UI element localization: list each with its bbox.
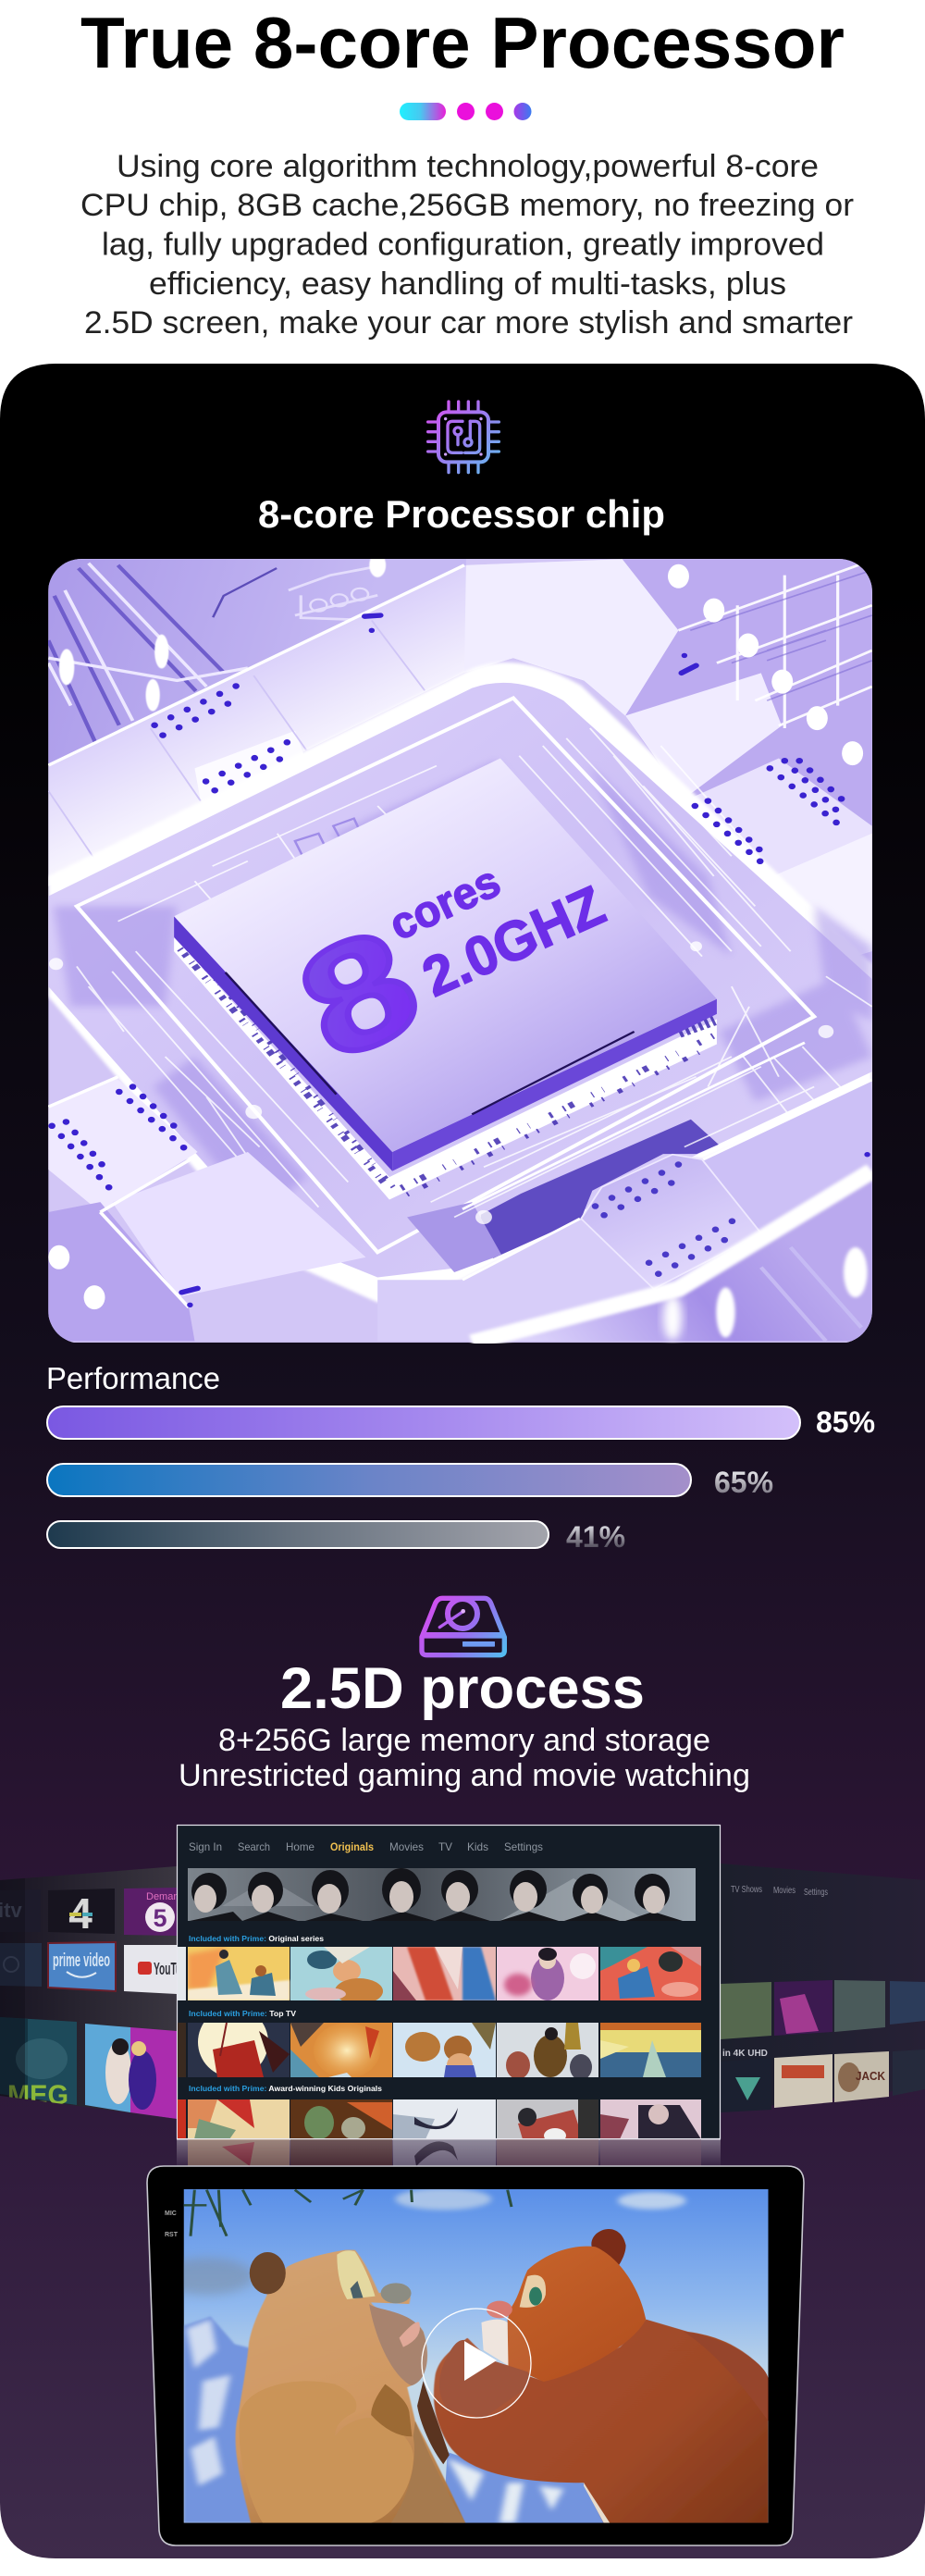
intro paragraph: lag, fully upgraded configuration, greatly improved [102,228,824,263]
text: storage description [179,1723,750,1793]
video scene [158,2188,769,2523]
bar: 41%: 41% [566,1520,625,1554]
screen reflection [177,2139,721,2166]
panel: right app wall [721,1864,925,2112]
app tile: YouTube: YouTube [154,1960,192,1978]
icon: hard drive [421,1598,505,1655]
panel: streaming app screen [177,1825,721,2143]
panel: processor illustration [48,553,874,1343]
bar: 65%: 65% [714,1466,773,1499]
row label: top TV: Included with Prime: Top TV [189,2009,296,2018]
menu text: Movies [773,1886,796,1896]
row label: award-winning: Included with Prime: Award-winning Kids Originals [189,2084,382,2093]
app tile: prime video: prime video [53,1951,110,1971]
icon: play button [422,2309,531,2418]
bar: 85%: 85% [816,1406,875,1439]
intro paragraph: CPU chip, 8GB cache,256GB memory, no freezing or [80,188,854,223]
text: storage description: 8+256G large memory and storage [218,1723,710,1758]
navigation menu: TV [438,1840,452,1853]
app tile: YouTube [124,1945,177,1994]
row label: original series: Included with Prime: Original series [189,1934,324,1943]
light upper pads [48,559,678,886]
app tile: channel 4 [48,1889,115,1938]
lower-left panels [48,1077,198,1212]
title: True 8-core Processor [80,2,845,83]
navigation menu: Movies [389,1840,424,1853]
app tile: demand 5: Demand [146,1891,185,1902]
navigation menu: Kids [467,1840,488,1853]
poster: The Meg: MEG [7,2080,68,2111]
app tile: search [0,1943,42,1987]
app tile: itv [0,1902,22,1917]
lower-right panels [377,1219,581,1303]
intro paragraph: 2.5D screen, make your car more stylish and smarter [84,305,853,341]
icon: processor chip [428,402,499,473]
poster: The Meg [0,2017,77,2111]
app tile: demand 5 [124,1888,177,1936]
decorative pill and dots [400,103,531,120]
posters: second row: JACK [856,2069,886,2083]
intro paragraph: efficiency, easy handling of multi-tasks, plus [149,266,786,302]
app tile: demand 5: 5 [153,1904,167,1932]
device labels: MIC [165,2211,177,2217]
menu text [731,1885,828,1898]
chip label: 8 cores 2.0GHZ: 2.0GHZ [413,873,613,1009]
top-left circuit [48,559,466,765]
heading: 2.5D process: 2.5D process [280,1656,645,1721]
intro paragraph [80,149,854,341]
ring around chip [48,663,872,1303]
bar: 41% [47,1520,625,1554]
top-right circuit [623,559,872,836]
device labels [165,2211,179,2238]
label: Performance: Performance [46,1361,220,1395]
label: 4K UHD: in 4K UHD [722,2049,768,2059]
menu text: TV Shows [731,1885,762,1895]
thumbnails: row three [188,2099,701,2138]
bar: 65% [47,1464,773,1499]
navigation menu: Search [238,1840,270,1853]
chip body [174,936,717,1199]
tablet device [147,2166,804,2545]
posters: first row [721,1980,925,2039]
chip label: 8 cores 2.0GHZ: cores [382,857,508,950]
app tile: channel 4: 4 [68,1889,92,1938]
navigation menu: Sign In [189,1840,222,1853]
portrait banner [188,1868,696,1921]
thumbnails: row two [188,2023,701,2077]
panel: left app wall [0,1866,192,2119]
slivers of posters at left edge [178,1947,186,2139]
text: storage description: Unrestricted gaming and movie watching [179,1758,750,1793]
menu text: Settings [804,1888,828,1898]
intro paragraph: Using core algorithm technology,powerful 8-core [117,149,819,184]
navigation menu [189,1840,543,1853]
device labels: RST [165,2232,179,2238]
chip label: 8 cores 2.0GHZ [302,873,609,1053]
posters: second row [721,2050,925,2112]
bar: 85% [47,1406,875,1439]
poster: two women [85,2024,177,2119]
navigation menu: Settings [504,1840,543,1853]
thumbnails: row one [188,1947,701,2004]
heading: 8-core Processor chip: 8-core Processor chip [258,492,665,536]
navigation menu: Originals [330,1840,374,1853]
bar chart: performance [46,1361,875,1554]
app tile: prime video [48,1942,116,1991]
navigation menu: Home [286,1840,314,1853]
chip label: 8 cores 2.0GHZ: 8 [276,895,443,1094]
